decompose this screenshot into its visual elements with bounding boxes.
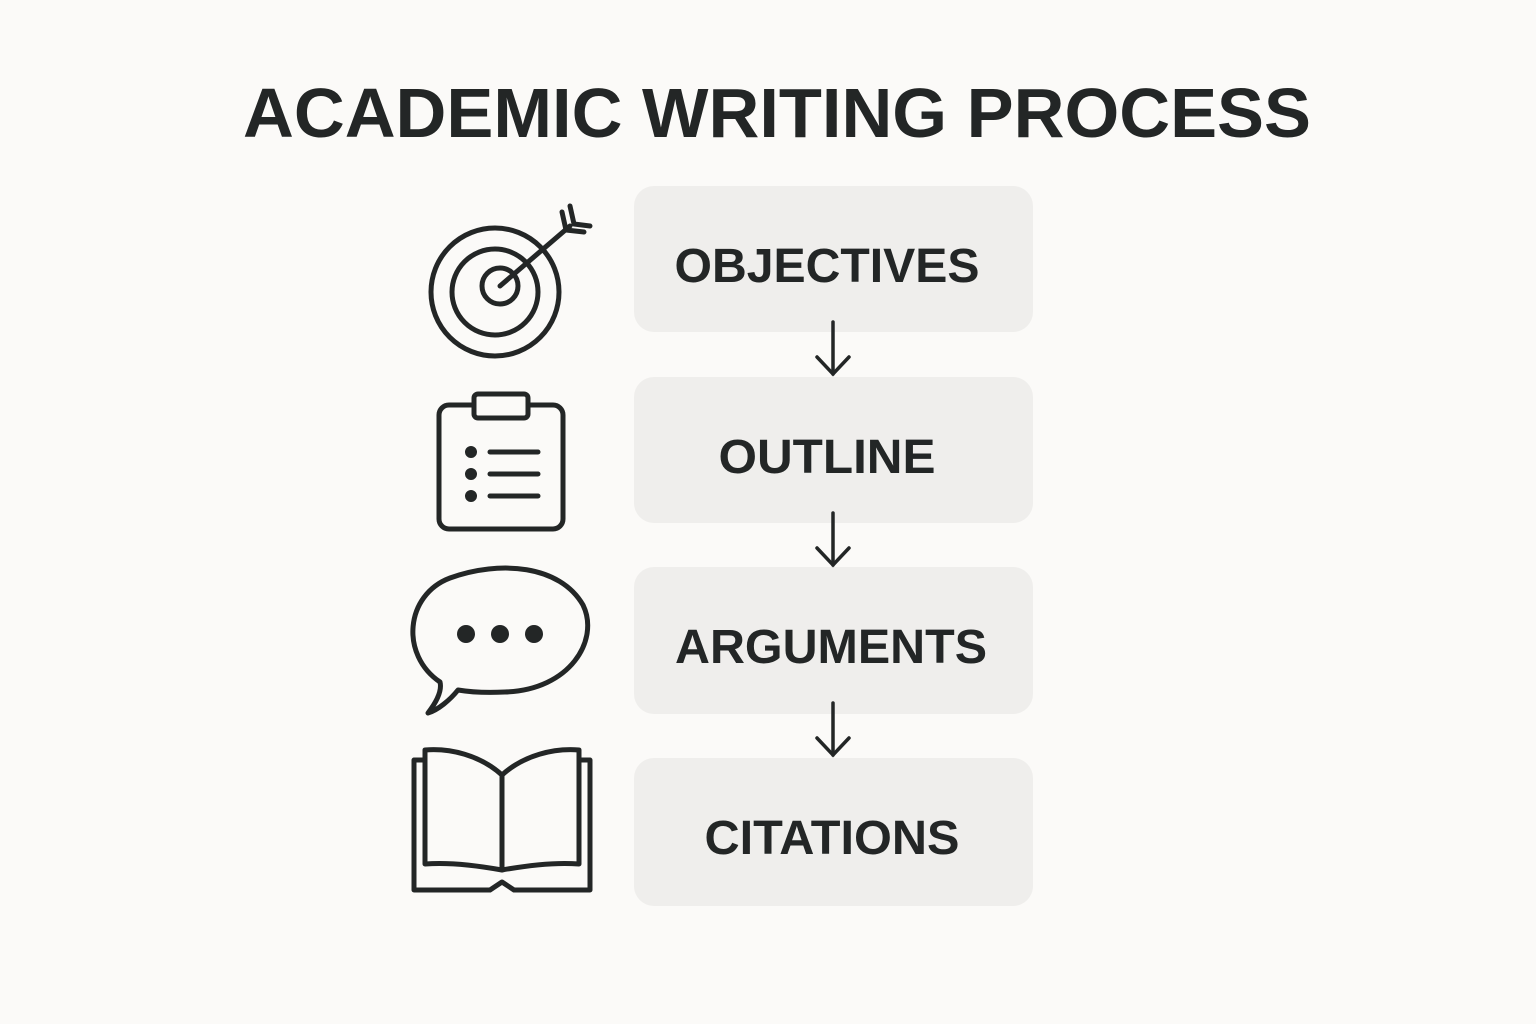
step box: outline: OUTLINE: [718, 431, 936, 484]
step box: objectives: [634, 186, 1033, 332]
arrow 2: [817, 513, 849, 565]
step box: outline: [634, 377, 1033, 523]
arrow 1: [817, 322, 849, 374]
icon: open book: [414, 750, 590, 890]
title: ACADEMIC WRITING PROCESS: [243, 74, 1311, 152]
icon: clipboard: [439, 394, 563, 529]
step box: arguments: [634, 567, 1033, 714]
step box: objectives: OBJECTIVES: [674, 240, 980, 293]
step box: arguments: ARGUMENTS: [675, 621, 987, 674]
icon: speech bubble: [413, 568, 588, 713]
step box: citations: CITATIONS: [704, 812, 960, 865]
step box: citations: [634, 758, 1033, 906]
arrow 3: [817, 703, 849, 755]
icon: target: [431, 206, 590, 356]
